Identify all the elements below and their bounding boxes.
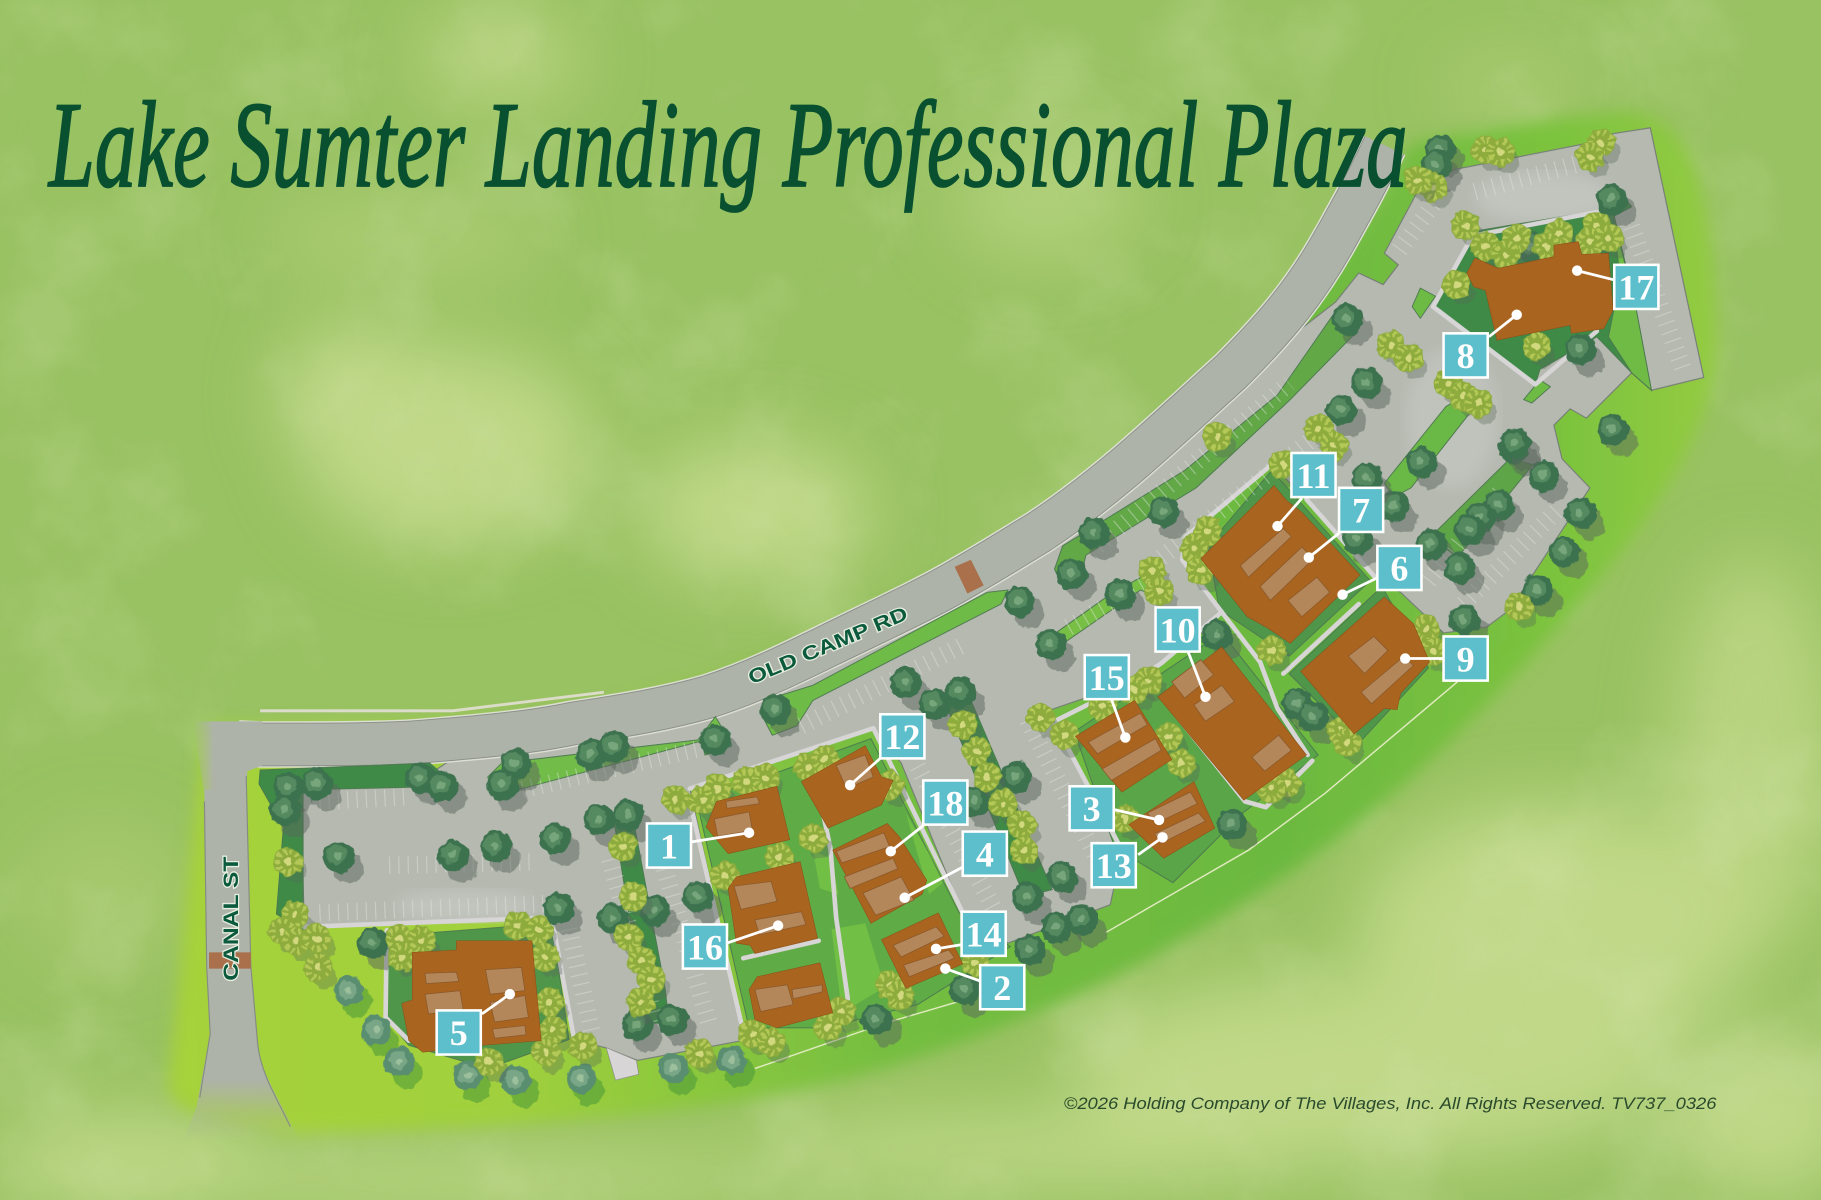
marker 14: 14 (966, 915, 1002, 955)
building: 11, 7, 6 (1201, 485, 1360, 643)
marker 3: 3 (1083, 789, 1101, 829)
marker 16: 16 (687, 927, 723, 967)
parking stall lines (319, 157, 1684, 1034)
marker 12 (845, 714, 924, 790)
street label: Canal St: CANAL ST (220, 856, 243, 981)
building: 10 (1158, 647, 1307, 800)
marker 12: 12 (884, 717, 920, 757)
building: 15 (1075, 700, 1172, 792)
copyright note: ©2026 Holding Company of The Villages, Inc. All Rights Reserved. TV737_0326 (1064, 1094, 1717, 1113)
marker 3 (1070, 786, 1164, 830)
street label: Old Camp Rd: OLD CAMP RD (745, 603, 911, 689)
marker 18: 18 (927, 783, 963, 823)
building: 12 (801, 746, 893, 828)
marker 11: 11 (1296, 456, 1330, 496)
building: 17, 8 (1467, 242, 1613, 340)
building: 18, 4 (833, 823, 927, 923)
marker 7 (1304, 488, 1383, 563)
marker 10: 10 (1160, 610, 1196, 650)
marker 6 (1337, 546, 1421, 600)
marker 6: 6 (1390, 549, 1408, 589)
marker 18 (886, 780, 967, 857)
green islands and planting strips (259, 192, 1651, 1068)
marker 7: 7 (1352, 491, 1370, 531)
marker 17: 17 (1618, 268, 1654, 308)
road surface: Old Camp Rd (238, 145, 1384, 744)
marker 2: 2 (993, 968, 1011, 1008)
marker 5: 5 (450, 1013, 468, 1053)
trees and palms (268, 128, 1638, 1107)
sidewalks (304, 211, 1600, 1043)
marker 8 (1444, 310, 1522, 377)
road surface: Canal St (183, 560, 984, 1140)
building: unnumbered south (749, 963, 833, 1028)
marker 4: 4 (976, 834, 994, 874)
marker 5 (437, 989, 515, 1055)
pavement: parking lots and drive aisles (301, 128, 1704, 1080)
marker 14 (931, 912, 1006, 956)
building: 3, 13 (1129, 782, 1215, 858)
marker 4 (899, 832, 1007, 903)
marker 15: 15 (1089, 658, 1125, 698)
marker 1 (647, 823, 754, 868)
marker 11 (1272, 453, 1336, 531)
marker 8: 8 (1457, 336, 1475, 376)
marker 16 (683, 920, 783, 969)
marker 13 (1092, 832, 1168, 887)
marker 10 (1156, 607, 1211, 702)
property line (755, 682, 1457, 1068)
marker 1: 1 (660, 826, 678, 866)
marker 17 (1572, 265, 1658, 309)
marker 13: 13 (1096, 846, 1132, 886)
marker 2 (940, 963, 1024, 1009)
building: 9 (1301, 597, 1430, 734)
marker 9: 9 (1457, 639, 1475, 679)
marker 15 (1085, 655, 1131, 743)
building: 14, 2 (881, 913, 963, 988)
lawn: site grounds (169, 113, 1717, 1134)
building: 1 (706, 786, 790, 854)
marker 9 (1400, 636, 1488, 681)
building: 5 (402, 941, 541, 1052)
building: 16 (728, 862, 818, 954)
